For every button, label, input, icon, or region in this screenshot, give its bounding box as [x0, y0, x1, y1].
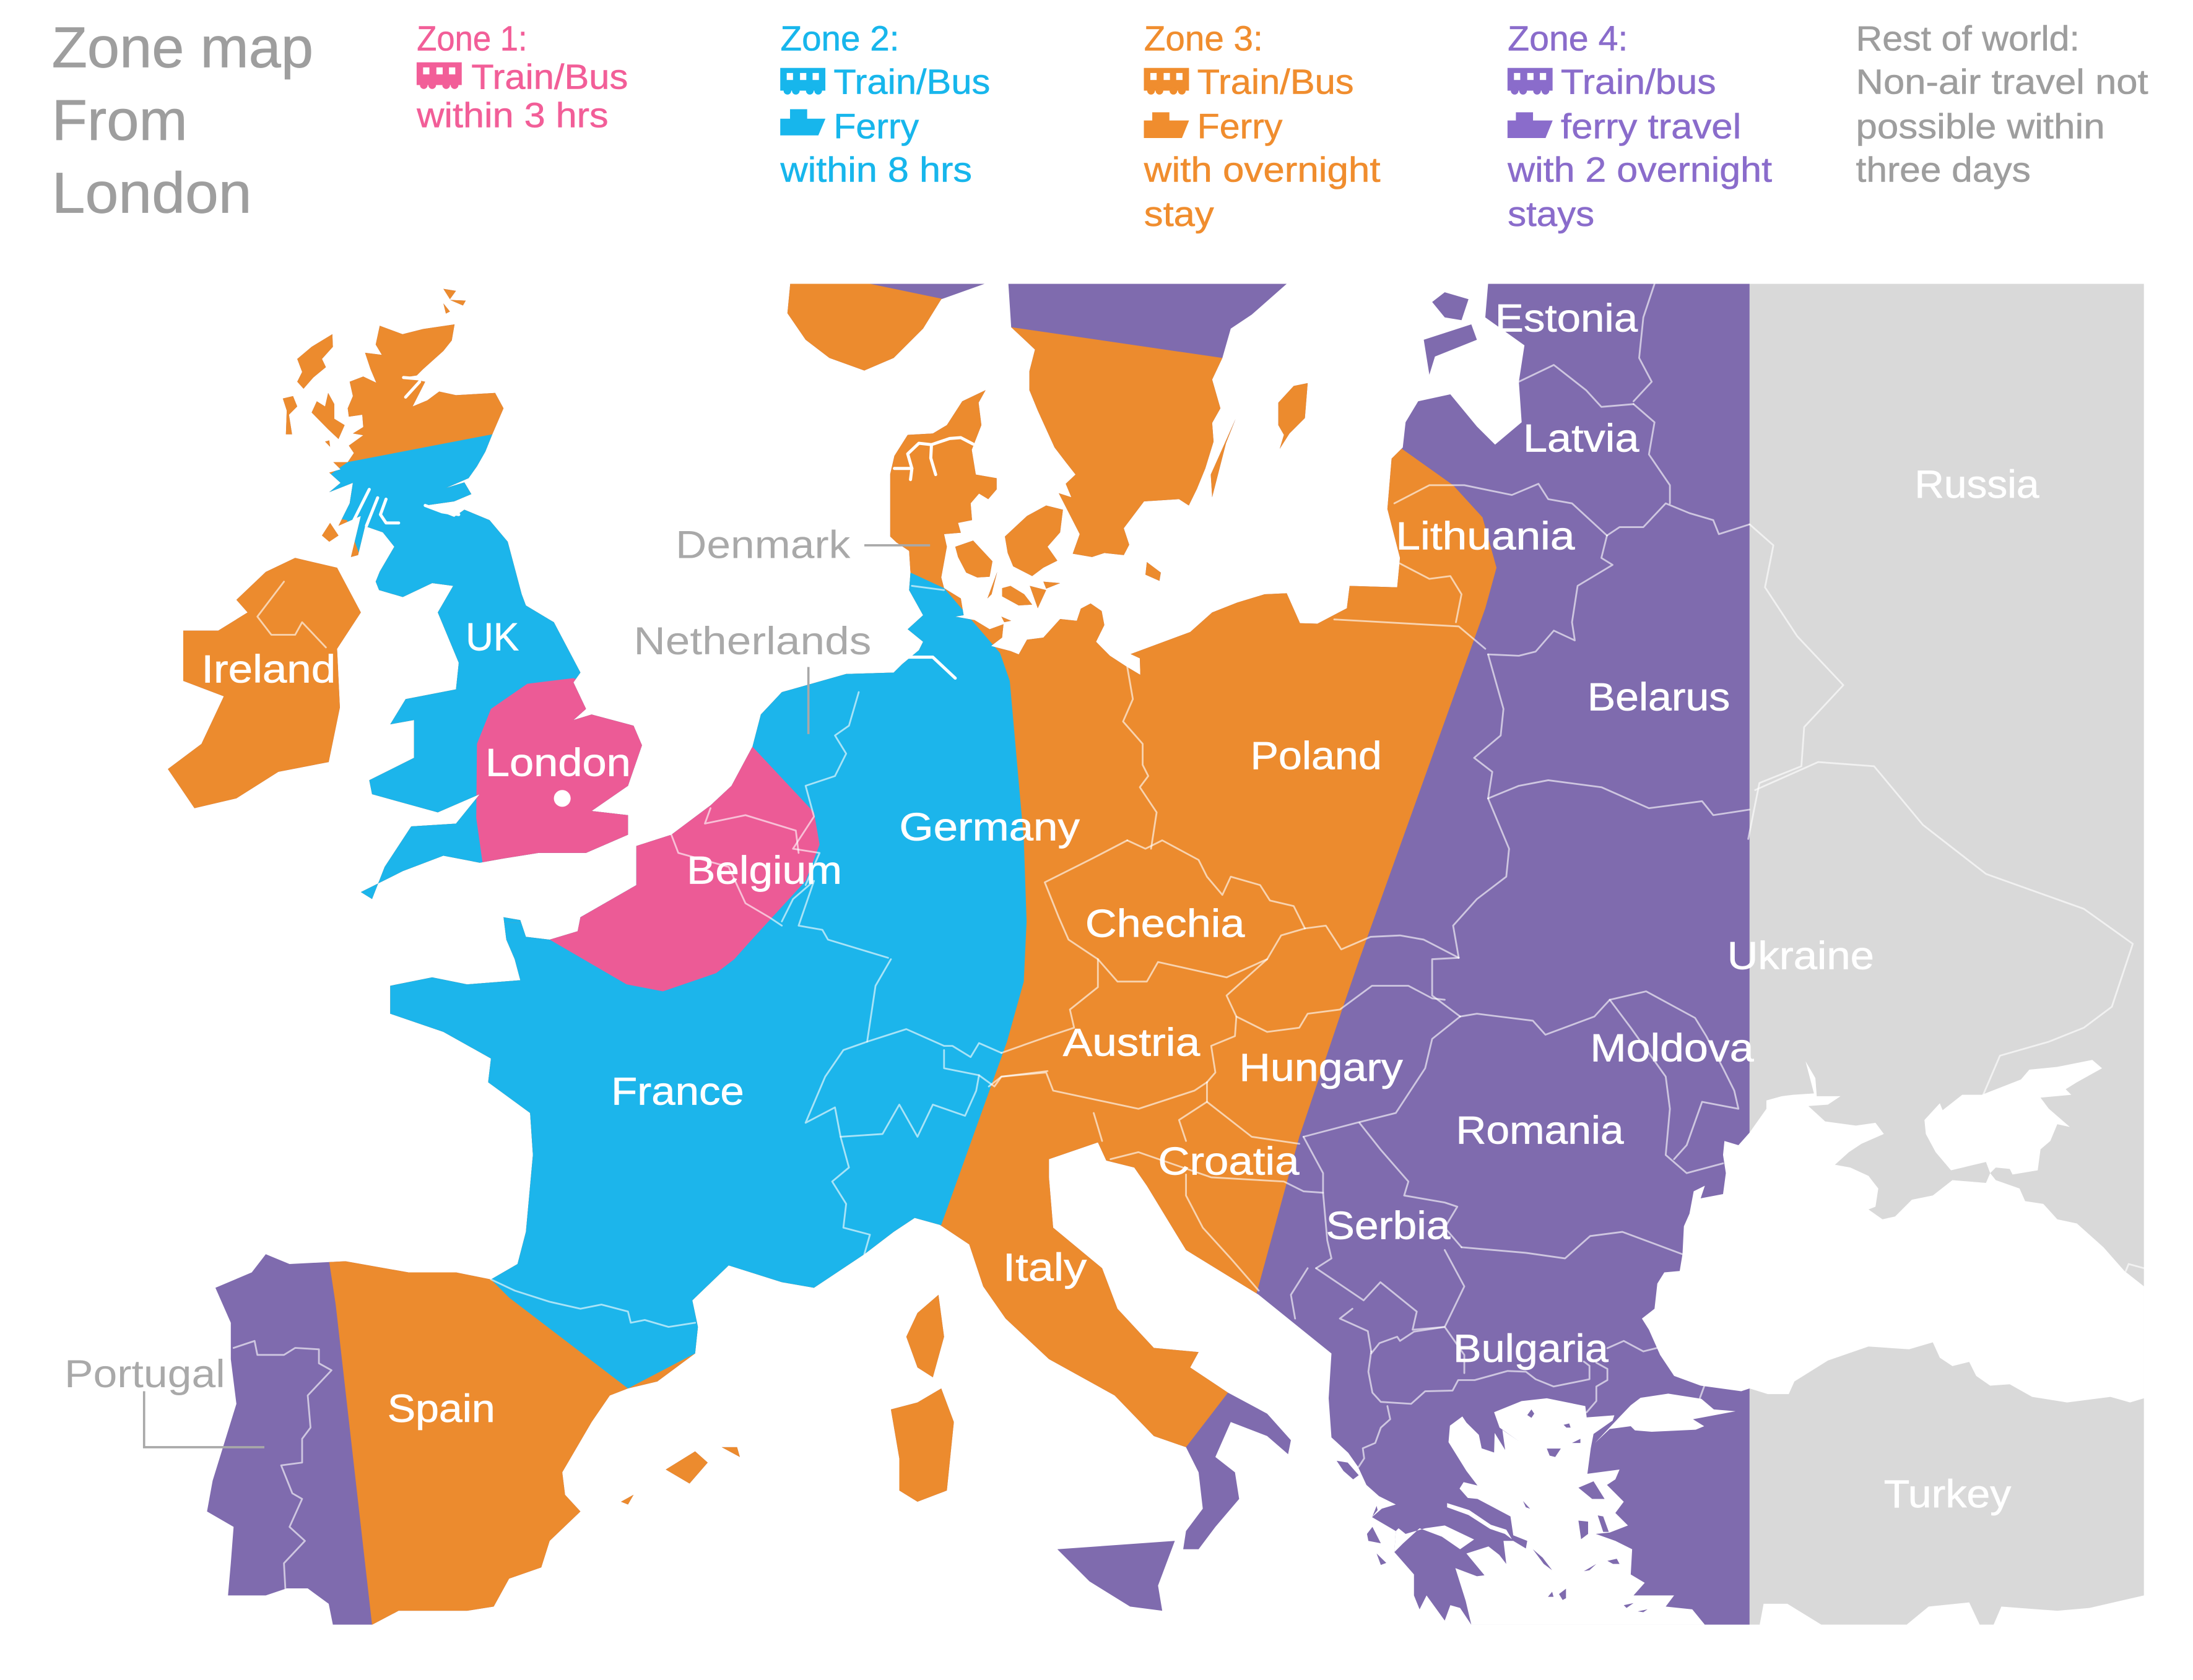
country labels: Belarus [1587, 675, 1730, 719]
country borders [233, 284, 2144, 1588]
islet: Islay orange part [322, 523, 339, 542]
icon: train zone 4 [1508, 68, 1552, 94]
legend: zone 2: Train/Bus [833, 62, 990, 101]
country labels: Moldova [1590, 1026, 1755, 1070]
country labels: Ireland [201, 647, 336, 691]
country labels: Latvia [1523, 417, 1639, 461]
legend: zone 3: Ferry [1197, 107, 1283, 146]
country labels: Spain [388, 1387, 495, 1431]
country labels: UK [466, 615, 519, 659]
legend: zone 4: Train/bus [1561, 62, 1716, 101]
legend: zone 1 [416, 19, 628, 135]
legend: rest of world: Non-air travel not [1856, 62, 2148, 101]
country labels: Hungary [1239, 1046, 1403, 1089]
icon: ferry zone 4 [1508, 113, 1552, 138]
country labels: Austria [1063, 1021, 1201, 1064]
legend: zone 1: Train/Bus [471, 57, 628, 96]
zone 2 area: continent [378, 573, 1027, 1388]
marker: London [554, 790, 571, 807]
country labels: France [611, 1070, 744, 1113]
map: zones of Europe [56, 284, 2145, 1636]
country labels: London [485, 742, 631, 785]
legend: zone 4: ferry travel [1561, 107, 1741, 146]
leader: Portugal [64, 1353, 264, 1447]
zone 4 area [56, 284, 1750, 1625]
icon: ferry zone 3 [1144, 113, 1189, 138]
country labels: Russia [1914, 463, 2039, 506]
icon: ferry zone 2 [781, 110, 825, 135]
legend: rest of world [1856, 19, 2148, 189]
legend: zone 2: within 8 hrs [779, 150, 972, 189]
legend: zone 4: stays [1508, 194, 1594, 233]
country labels [201, 297, 2039, 1516]
country labels: Bulgaria [1453, 1327, 1609, 1370]
legend: zone 2 [779, 19, 990, 189]
zone 1 area: London and Belgium [476, 678, 820, 992]
legend: zone 3 [1144, 19, 1381, 233]
legend: zone 3: Zone 3: [1144, 19, 1263, 58]
legend: zone 1: within 3 hrs [416, 96, 609, 135]
country labels: Belgium [687, 849, 842, 893]
label: Denmark: Denmark [675, 523, 851, 566]
legend: zone 3: Train/Bus [1197, 62, 1354, 101]
legend: zone 4: Zone 4: [1508, 19, 1628, 58]
country labels: Ukraine [1727, 934, 1874, 977]
legend: rest of world: possible within [1856, 107, 2105, 146]
icon: train zone 3 [1144, 68, 1189, 94]
legend: zone 4 [1507, 19, 1772, 233]
legend: zone 1: Zone 1: [417, 19, 528, 58]
icon: train zone 2 [781, 68, 825, 94]
country labels: Croatia [1158, 1140, 1300, 1183]
title: London [52, 160, 252, 225]
icon: train zone 1 [417, 63, 461, 89]
rest of world area [1750, 284, 2144, 1625]
country labels: Germany [900, 806, 1080, 849]
country labels: Chechia [1085, 902, 1245, 945]
seas: Black Sea, Azov, Aegean, Marmara [1394, 1060, 2145, 1626]
legend: zone 2: Ferry [833, 107, 919, 146]
legend: zone 2: Zone 2: [781, 19, 900, 58]
zone 3 area [70, 284, 1496, 1636]
country labels: Romania [1456, 1109, 1624, 1153]
title: Zone map [52, 15, 313, 79]
islets in the Aegean and Ionian [1337, 1409, 1648, 1612]
zone 2 area: UK [319, 435, 643, 923]
legend: zone 4: with 2 overnight [1507, 150, 1772, 189]
legend: zone 3: stay [1144, 194, 1215, 233]
country labels: Turkey [1884, 1473, 2012, 1516]
country labels: Serbia [1326, 1204, 1451, 1247]
legend: rest of world: Rest of world: [1856, 19, 2080, 58]
title: From [52, 88, 188, 152]
label: Portugal: Portugal [64, 1353, 225, 1396]
country labels: Italy [1003, 1246, 1087, 1289]
label: Netherlands: Netherlands [633, 620, 871, 663]
country labels: Lithuania [1396, 515, 1575, 558]
white inlets: Limfjord, Elbe, Firths [354, 378, 973, 678]
country labels: Poland [1250, 734, 1382, 777]
legend: zone 3: with overnight [1144, 150, 1381, 189]
title [52, 15, 313, 225]
legend: rest of world: three days [1856, 150, 2031, 189]
country labels: Estonia [1495, 297, 1638, 340]
